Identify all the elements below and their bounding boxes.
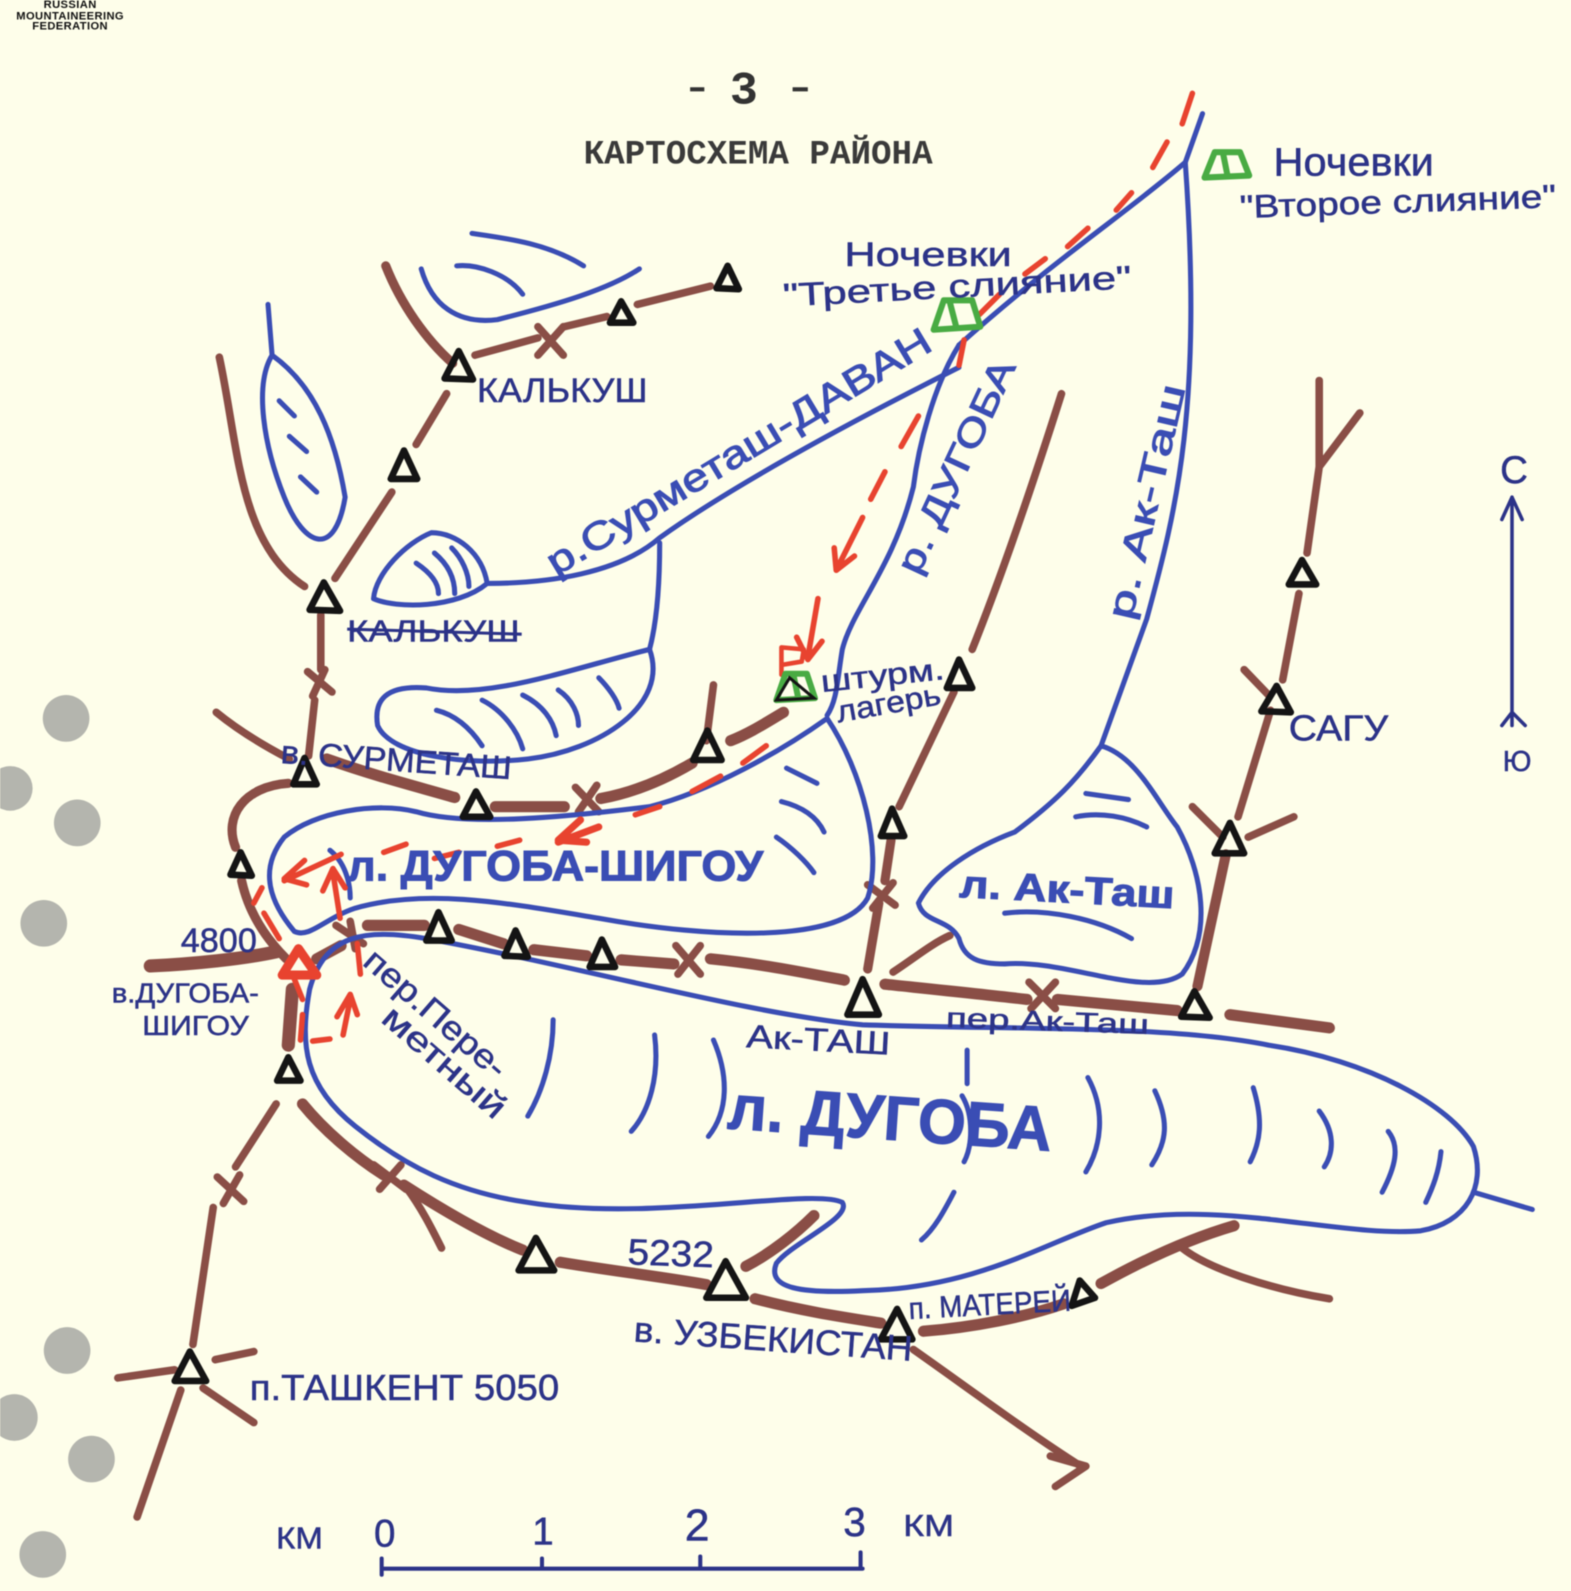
label: Peremetny pass: пер.Пере-	[356, 942, 514, 1086]
label: Dugoba-Shigou peak	[112, 977, 259, 1041]
red route	[254, 93, 1192, 1041]
label: Dugoba river: р. ДУГОБА	[889, 352, 1024, 580]
label: Sagu: САГУ	[1289, 708, 1389, 749]
label: Ak-Tash glacier: л. Ак-Таш	[959, 863, 1176, 917]
label: 4800 height: 4800	[181, 922, 257, 960]
label: Surmetash peak: в. СУРМЕТАШ	[280, 734, 513, 786]
punched holes	[0, 695, 115, 1578]
upper glacier Kalkush	[374, 533, 487, 605]
label: height 5232: 5232	[627, 1231, 715, 1275]
glacier Dugoba-Shigou	[269, 718, 873, 933]
summit triangles	[175, 266, 1316, 1381]
label: Third confluence camp	[782, 236, 1132, 313]
label: Ak-Tash river: р. Ак-Таш	[1099, 380, 1193, 623]
label: assault camp: штурм.	[819, 652, 946, 699]
label: Uzbekistan peak: в. УЗБЕКИСТАН	[633, 1309, 914, 1369]
scale bar: 3	[843, 1499, 866, 1545]
label: Peremetny pass	[356, 942, 514, 1127]
label: Third confluence camp: Ночевки	[844, 236, 1012, 274]
glacier Ak-Tash	[918, 746, 1201, 982]
summit Dugoba-Shigou red triangle	[282, 949, 317, 975]
top glacier	[421, 233, 639, 320]
main glacier Dugoba	[305, 934, 1532, 1291]
label: Surmetash-Davan river: р.Сурметаш-ДАВАН	[539, 320, 939, 584]
scale bar: КМ	[276, 1521, 323, 1555]
middle glacier	[377, 649, 653, 761]
label: Tashkent peak: п.ТАШКЕНТ 5050	[250, 1367, 559, 1408]
label: Ak-Tash pass: пер.Ак-Таш	[946, 1002, 1150, 1040]
ridges	[118, 266, 1360, 1517]
rivers	[487, 114, 1203, 746]
tent camp: third confluence	[934, 300, 980, 330]
page number	[690, 65, 808, 118]
scale bar: 0	[374, 1512, 395, 1555]
label: Second confluence camp: "Второе слияние"	[1239, 178, 1557, 225]
label: Peremetny pass: метный	[374, 999, 514, 1127]
label: Dugoba glacier: л. ДУГОБА	[726, 1072, 1054, 1165]
label: assault camp	[819, 652, 946, 729]
north-south compass arrow	[1500, 449, 1531, 778]
tent camp: second confluence	[1205, 152, 1249, 178]
label: Kalkush glacier struck through: КАЛЬКУШ	[347, 614, 520, 648]
scale bar	[276, 1499, 954, 1575]
scale bar: 2	[685, 1501, 710, 1550]
label: Dugoba-Shigou peak: ШИГОУ	[142, 1010, 249, 1041]
title: КАРТОСХЕМА РАЙОНА	[584, 133, 933, 174]
label: Third confluence camp: "Третье слияние"	[782, 259, 1132, 313]
label: Materey peak: п. МАТЕРЕЙ	[908, 1282, 1072, 1326]
label: Dugoba-Shigou peak: в.ДУГОБА-	[112, 977, 259, 1008]
scale bar: КМ	[903, 1509, 954, 1543]
north-south compass arrow: Ю	[1503, 746, 1531, 778]
label: Second confluence camp	[1239, 141, 1557, 225]
federation logo text: MOUNTAINEERING	[16, 10, 124, 22]
federation logo text: FEDERATION	[32, 20, 108, 32]
label: Kalkush peak: КАЛЬКУШ	[477, 372, 648, 410]
label: assault camp: лагерь	[834, 678, 943, 729]
tent camp: assault camp	[776, 674, 815, 700]
left glacier	[263, 304, 345, 539]
pass crossings	[217, 327, 1055, 1203]
federation logo text	[16, 0, 124, 32]
page number: 3	[730, 65, 758, 118]
north-south compass arrow: С	[1500, 449, 1528, 492]
label: Ak-Tash peak: Ак-ТАШ	[746, 1018, 891, 1062]
label: Second confluence camp: Ночевки	[1274, 141, 1434, 185]
label: Dugoba-Shigou glacier: л. ДУГОБА-ШИГОУ	[347, 843, 764, 891]
scale bar: 1	[532, 1510, 554, 1553]
